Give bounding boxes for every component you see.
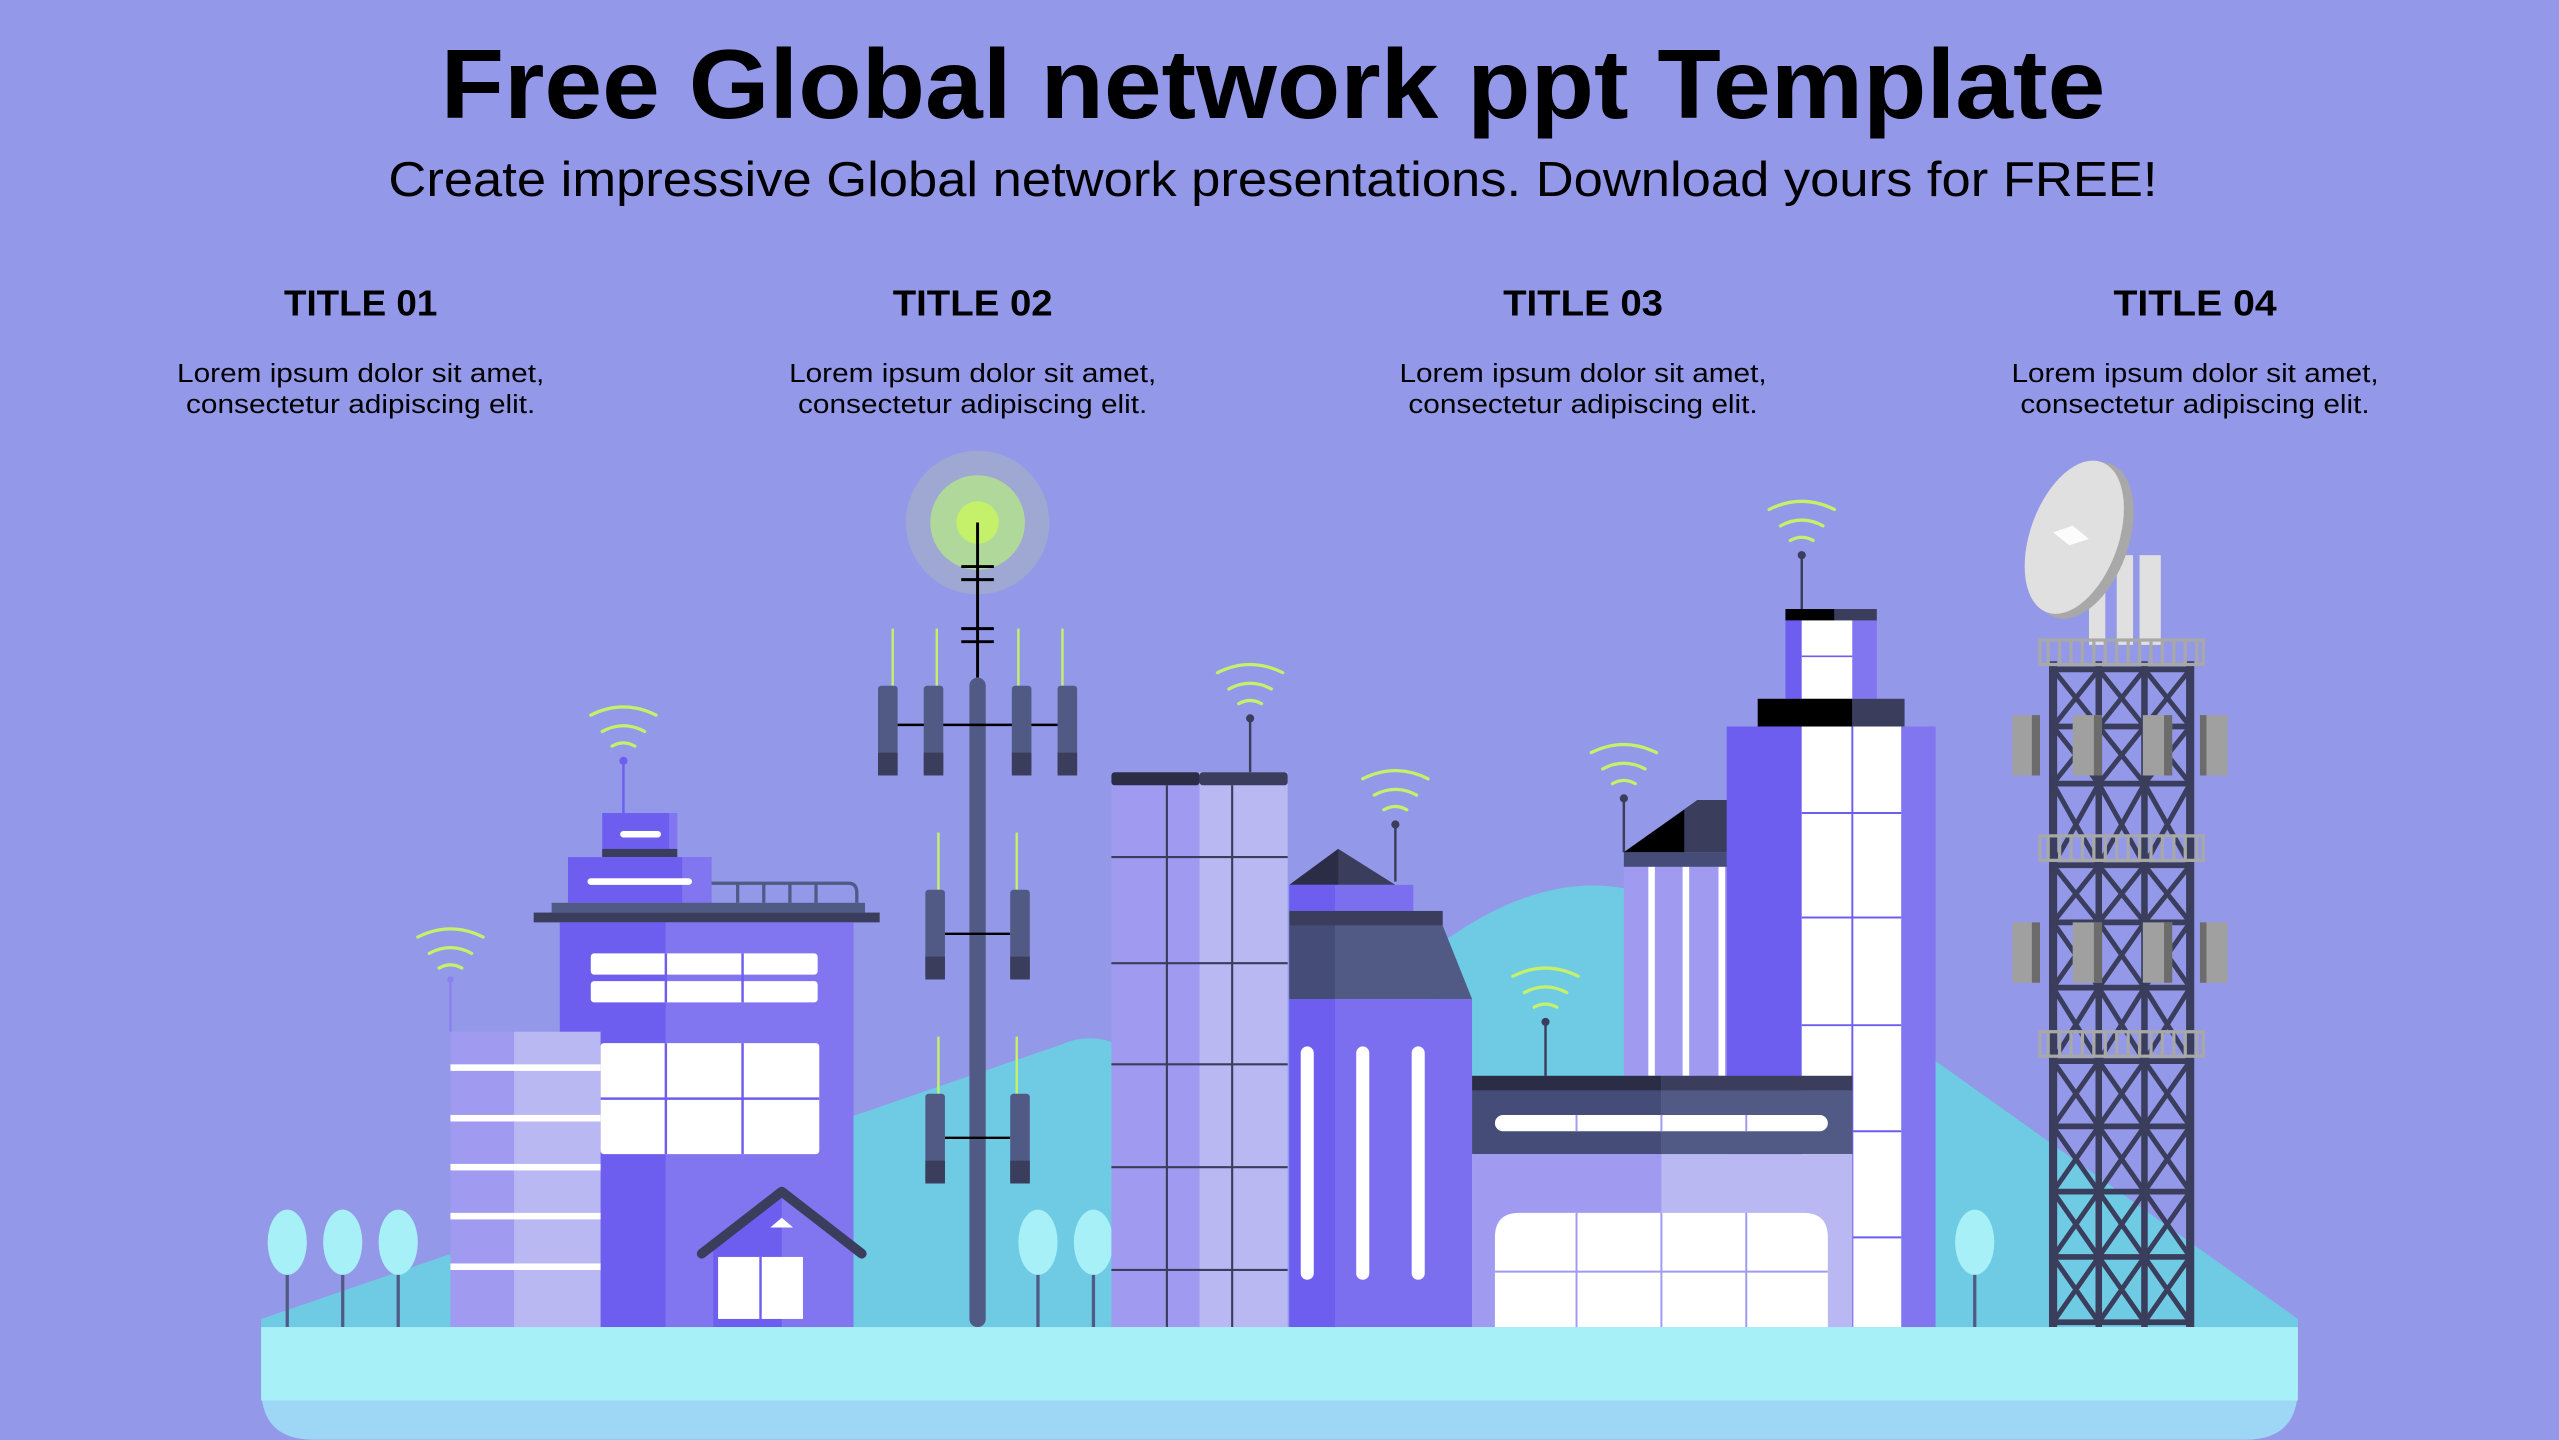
- text block: title 01: TITLE 01: [284, 283, 437, 323]
- text block: title 02: [789, 283, 1156, 419]
- text block: title 04: consectetur adipiscing elit.: [2020, 389, 2370, 419]
- title: Free Global network ppt Template: [441, 29, 2105, 139]
- building E low: [1472, 968, 1852, 1327]
- text block: title 03: [1399, 283, 1767, 419]
- text block: title 02: consectetur adipiscing elit.: [798, 389, 1147, 419]
- text block: title 04: TITLE 04: [2113, 283, 2277, 323]
- trees: [268, 1210, 1994, 1327]
- text block: title 04: Lorem ipsum dolor sit amet,: [2011, 358, 2379, 388]
- building B: [534, 707, 880, 1327]
- text block: title 02: Lorem ipsum dolor sit amet,: [789, 358, 1156, 388]
- text block: title 04: [2011, 283, 2379, 419]
- cell tower: [878, 451, 1077, 1327]
- hills: [261, 886, 2298, 1327]
- building C glass: [1111, 665, 1288, 1327]
- ground platform: [261, 1327, 2298, 1440]
- text block: title 03: Lorem ipsum dolor sit amet,: [1399, 358, 1767, 388]
- text block: title 01: [177, 283, 544, 419]
- text block: title 03: consectetur adipiscing elit.: [1408, 389, 1758, 419]
- text block: title 02: TITLE 02: [893, 283, 1053, 323]
- building G tall: [1727, 501, 1936, 1327]
- building F pillared: [1591, 744, 1746, 1076]
- text block: title 01: consectetur adipiscing elit.: [186, 389, 535, 419]
- building D: [1289, 771, 1472, 1327]
- house: [702, 1192, 862, 1327]
- text block: title 01: Lorem ipsum dolor sit amet,: [177, 358, 544, 388]
- building A: [418, 929, 601, 1327]
- lattice tower with dish: [2006, 447, 2228, 1327]
- subtitle: Create impressive Global network presentations. Download yours for FREE!: [388, 153, 2158, 207]
- text block: title 03: TITLE 03: [1503, 283, 1663, 323]
